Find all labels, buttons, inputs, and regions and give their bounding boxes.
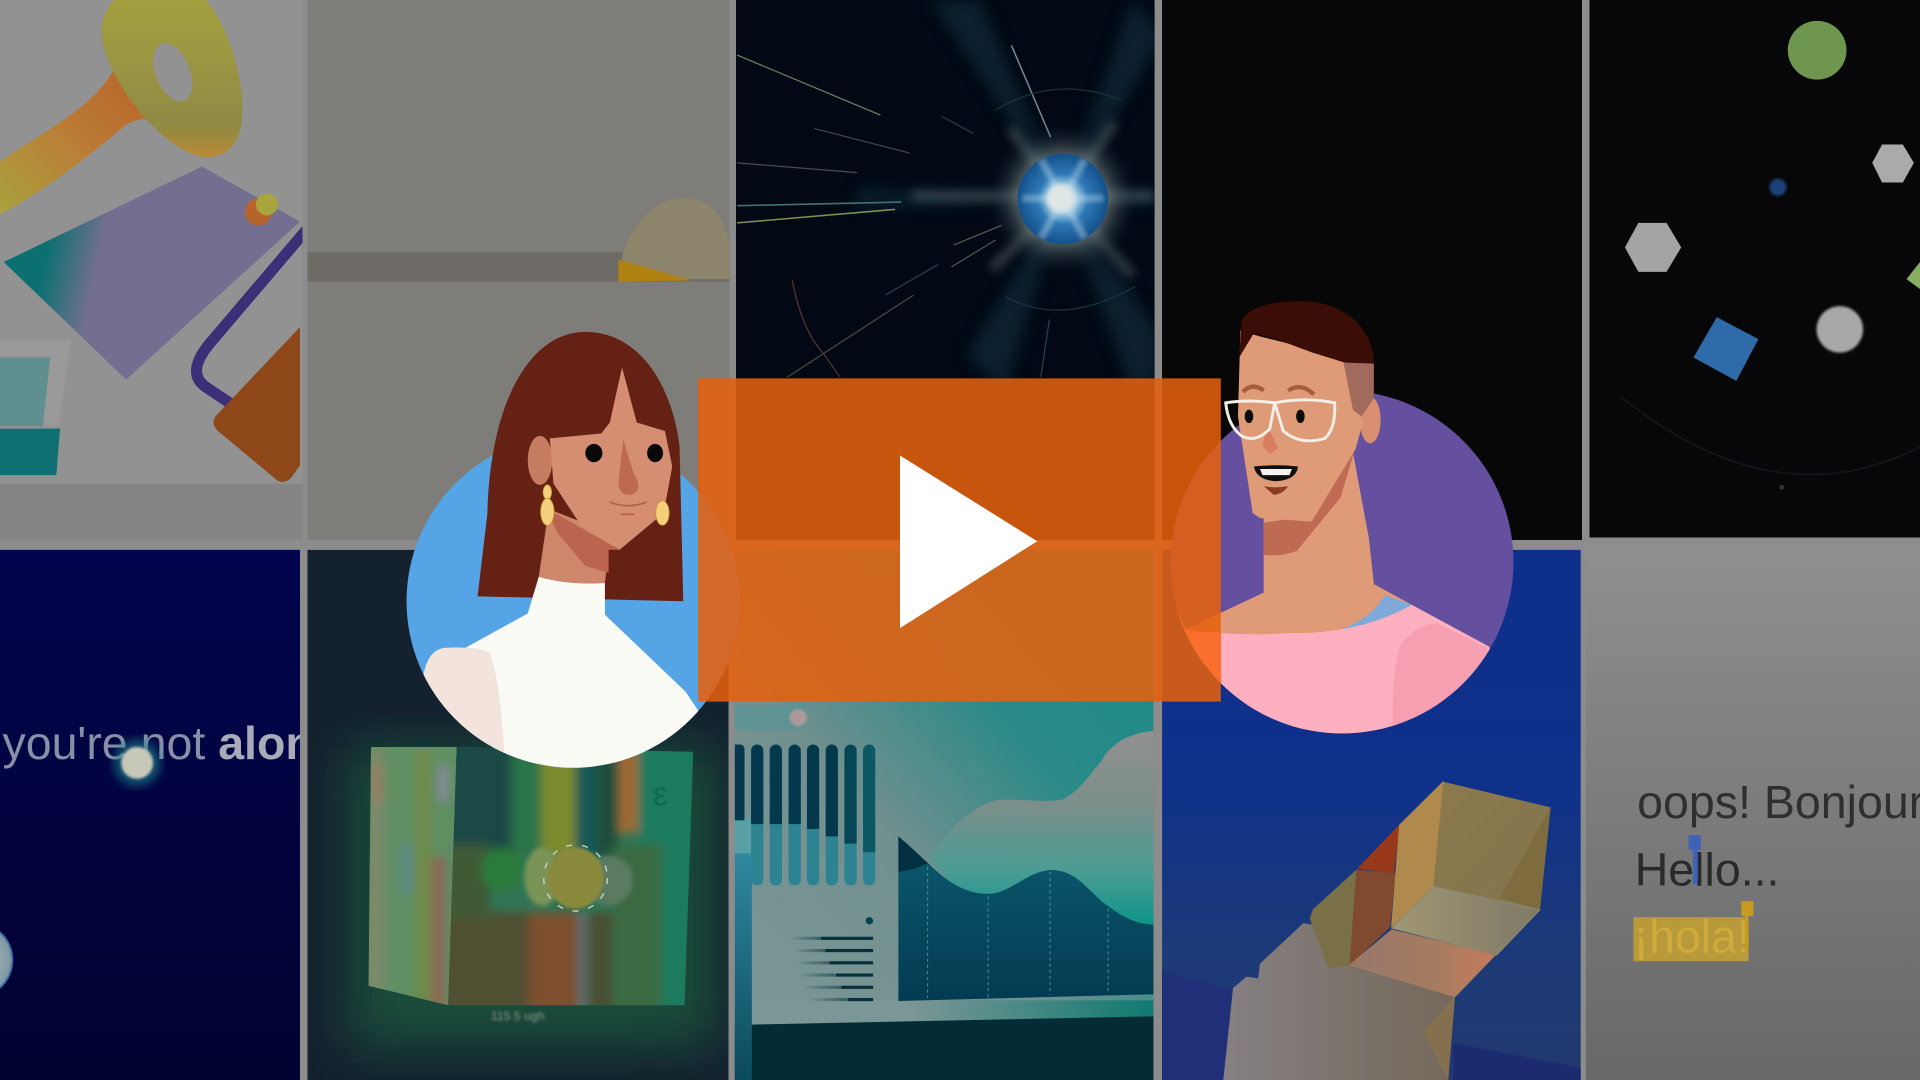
icon: green edge shape <box>1907 262 1920 289</box>
icon: purple tube and orange diamond <box>196 230 306 482</box>
neck <box>539 508 624 583</box>
eyes <box>585 444 663 462</box>
eyes <box>1245 410 1305 423</box>
glasses <box>1226 400 1335 441</box>
text: Hello...: Hello... <box>1635 843 1779 895</box>
ear <box>528 436 552 485</box>
legend lines <box>790 917 873 1001</box>
icon: white glow circle <box>1817 306 1863 353</box>
panel: egg on shelf <box>307 0 732 540</box>
highlighted text: ¡hola!: ¡hola! <box>1633 911 1750 963</box>
mouth <box>610 502 647 514</box>
character: woman <box>392 332 747 784</box>
brows <box>1243 387 1314 394</box>
panel: starburst <box>736 0 1163 540</box>
icon: light orb <box>114 740 160 786</box>
bar columns <box>735 744 875 885</box>
icon: pink dot <box>790 709 807 726</box>
ear <box>1360 397 1381 443</box>
text: oops! Bonjour: oops! Bonjour <box>1637 776 1920 828</box>
panel: funnel and card illustration <box>0 0 302 482</box>
icon: teal blocks <box>0 358 60 476</box>
wide light beams <box>857 0 1163 392</box>
icon: blue text cursor <box>1689 835 1701 884</box>
icon: funnel <box>0 0 242 214</box>
shaved side <box>1343 361 1374 416</box>
panel: holographic box <box>307 550 729 1080</box>
icon: blue square <box>1693 317 1758 381</box>
text: tiny caption: 115 5 ugh <box>491 1009 545 1023</box>
nose <box>618 440 638 495</box>
icon: holographic box front face <box>448 747 693 1006</box>
earrings <box>541 485 669 525</box>
text: glyph on box: ε <box>653 776 668 814</box>
star glow <box>912 122 1155 276</box>
panel: language text <box>1586 697 1920 1080</box>
face <box>1238 331 1363 522</box>
hair <box>1239 301 1374 364</box>
icon: play triangle <box>900 456 1037 628</box>
icon: holographic box left face <box>368 747 456 1006</box>
icon: lens in box <box>480 845 633 911</box>
icon: small hexagon <box>1872 144 1914 182</box>
rays <box>737 45 1135 377</box>
icon: edge orb <box>0 931 14 989</box>
mouth <box>1254 465 1298 495</box>
panel: floating shapes <box>1589 0 1920 538</box>
face <box>550 367 672 550</box>
area chart <box>898 731 1153 1001</box>
man's shirt seen through panel <box>1177 609 1221 683</box>
icon: tilted card <box>4 167 300 380</box>
panel: dark empty cell <box>1162 0 1582 540</box>
icon: blurred blue dot <box>1769 179 1787 196</box>
hair <box>478 332 683 601</box>
panel: you're not alone <box>0 550 300 1080</box>
sweater <box>392 577 747 784</box>
icon: stacked blocks <box>1223 782 1551 1080</box>
panel: 3D blocks on blue <box>1162 550 1581 1080</box>
play button panel <box>698 378 1221 702</box>
text: you're not alone: you're not alone <box>2 717 340 769</box>
icon: large hexagon <box>1625 223 1681 272</box>
icon: green circle <box>1788 21 1847 80</box>
neck and shoulders <box>1163 447 1524 747</box>
nose <box>1262 426 1278 454</box>
character: man <box>1163 301 1524 747</box>
panel: teal data chart <box>735 550 1153 1080</box>
icon: egg <box>618 198 732 282</box>
